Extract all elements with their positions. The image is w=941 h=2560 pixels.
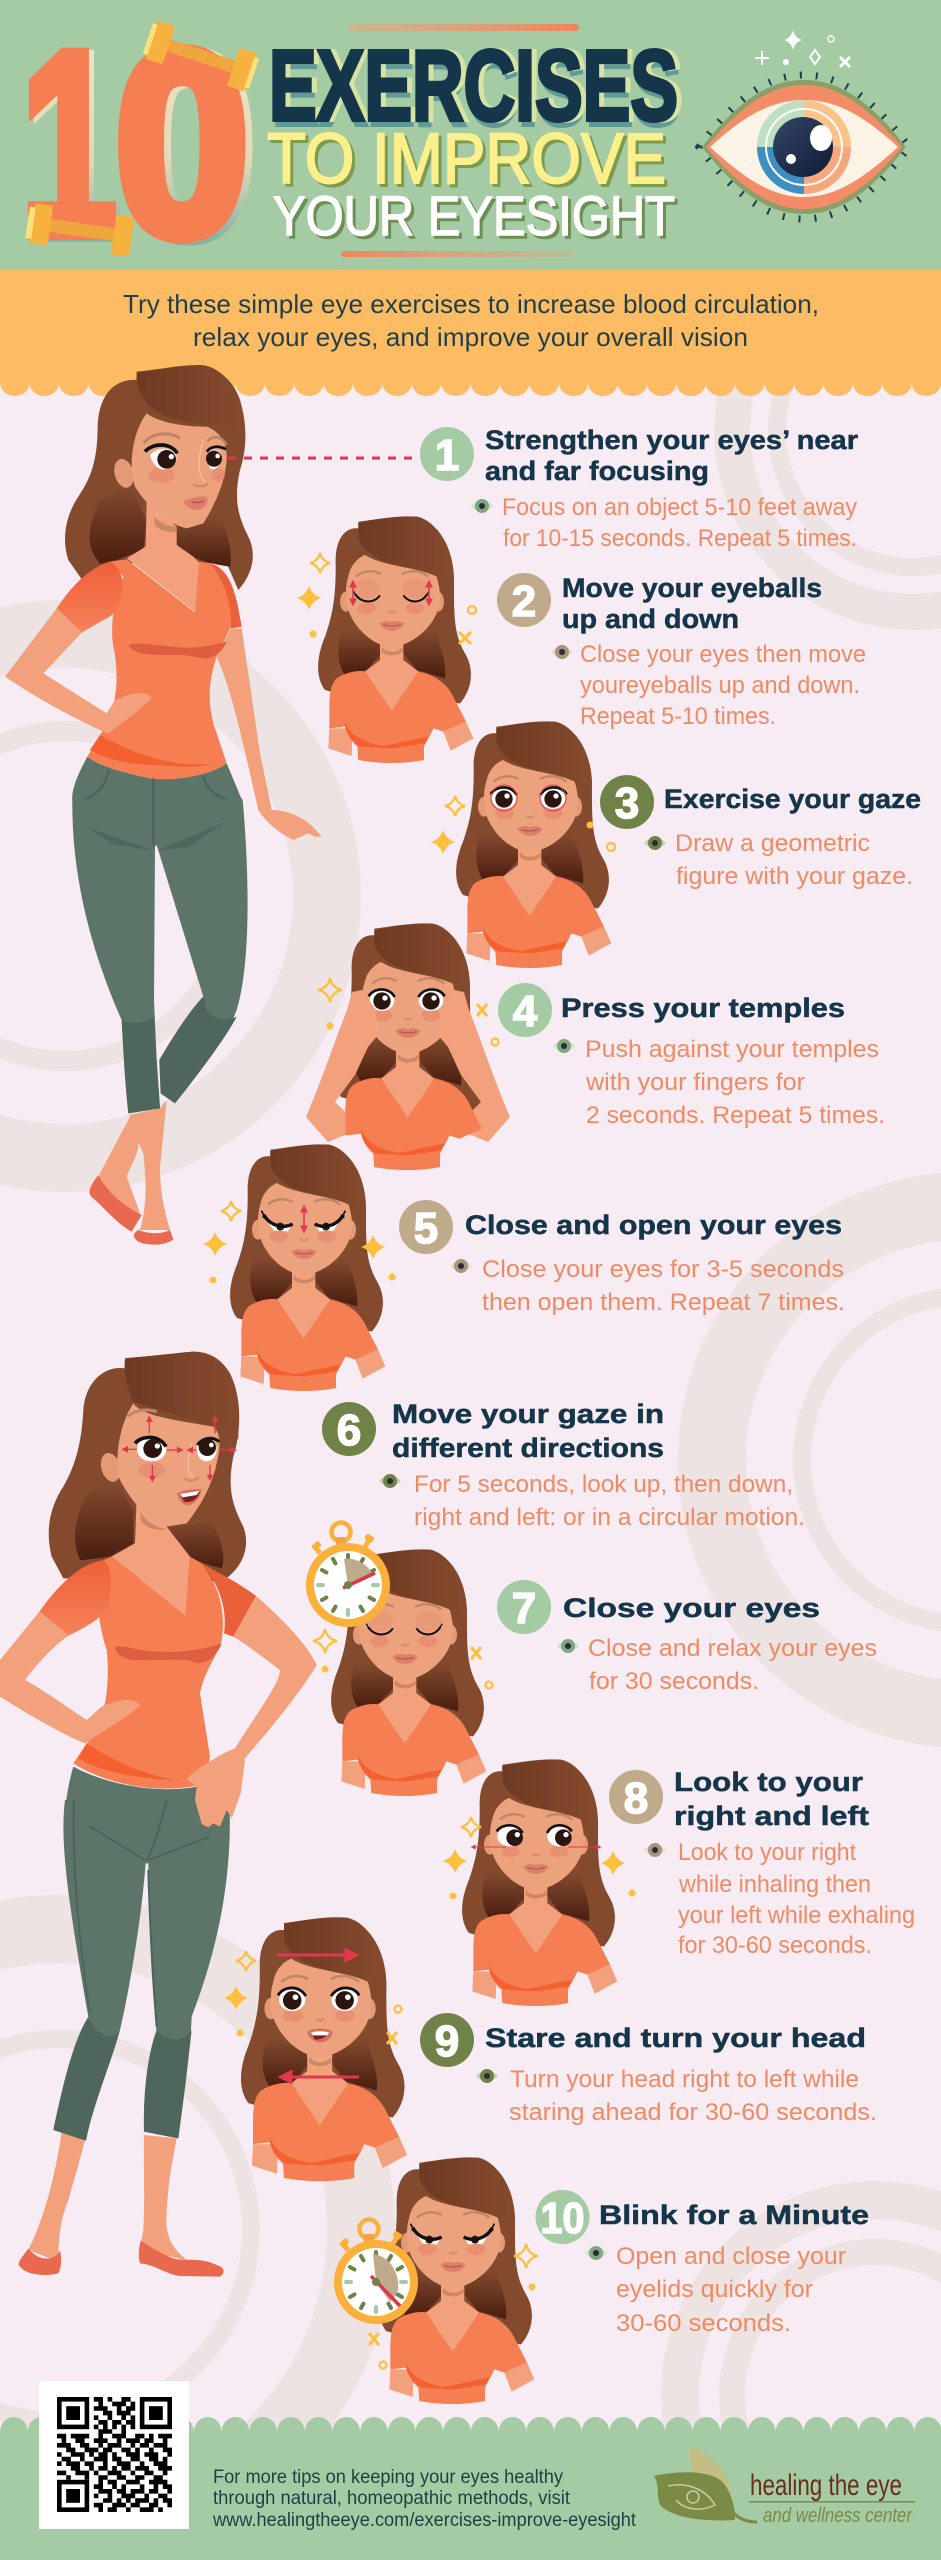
description 10: 30-60 seconds. — [616, 2310, 791, 2337]
step 4 — [498, 983, 885, 1129]
logo: and wellness center — [763, 2505, 913, 2527]
description 3 — [675, 830, 913, 890]
description 7: for 30 seconds. — [589, 1668, 759, 1695]
heading 2: Move your eyeballs — [562, 573, 822, 603]
numeral 10: 1 — [21, 0, 117, 290]
intro text: relax your eyes, and improve your overall vision — [193, 322, 748, 352]
step 2 — [497, 573, 866, 730]
bullet eye 8 — [644, 1843, 666, 1857]
step 5 — [399, 1200, 845, 1316]
heading 2: up and down — [562, 604, 739, 634]
heading 5: Close and open your eyes — [465, 1210, 842, 1240]
description 4 — [585, 1036, 885, 1129]
figure: woman one, standing — [5, 365, 322, 1245]
figure: bust for step 10 — [379, 2157, 534, 2404]
description 1 — [502, 494, 857, 552]
badge 3 — [600, 775, 654, 829]
step 10 — [536, 2190, 869, 2337]
step 3 — [600, 775, 921, 890]
heading 1 — [485, 425, 859, 486]
badge 6 — [322, 1402, 376, 1456]
badge 7: 7 — [512, 1584, 536, 1633]
step 7 — [497, 1580, 877, 1695]
footer text — [212, 2467, 637, 2531]
description 5: then open them. Repeat 7 times. — [482, 1289, 845, 1316]
bullet eye 2 — [551, 645, 573, 659]
icon: sparkles — [755, 30, 850, 67]
numeral 10 — [21, 0, 256, 292]
intro text — [123, 289, 819, 352]
description 3: Draw a geometric — [675, 830, 870, 857]
description 6: right and left: or in a circular motion. — [414, 1504, 805, 1531]
description 8: your left while exhaling — [678, 1902, 915, 1929]
figure: bust for step 7 — [331, 1549, 486, 1796]
logo — [654, 2445, 915, 2527]
description 8: for 30-60 seconds. — [678, 1932, 872, 1959]
heading 7: Close your eyes — [563, 1593, 820, 1623]
description 4: 2 seconds. Repeat 5 times. — [586, 1102, 885, 1129]
panel: header — [0, 0, 941, 292]
badge 2: 2 — [512, 577, 536, 626]
description 10 — [616, 2243, 846, 2337]
figure: bust for step 2 — [318, 516, 473, 763]
title: EXERCISES: EXERCISES — [272, 35, 681, 147]
bullet eye 7 — [557, 1639, 579, 1653]
title: YOUR EYESIGHT: YOUR EYESIGHT — [273, 184, 675, 247]
description 8: Look to your right — [678, 1839, 856, 1866]
description 10: eyelids quickly for — [616, 2276, 813, 2303]
description 2: youreyeballs up and down. — [580, 672, 860, 699]
bullet eye 1 — [471, 499, 493, 513]
badge 1 — [420, 427, 474, 481]
description 4: Push against your temples — [585, 1036, 879, 1063]
bullet eye 3 — [644, 836, 666, 850]
intro text: Try these simple eye exercises to increase blood circulation, — [123, 289, 819, 319]
bullet eye 10 — [585, 2246, 607, 2260]
heading 6 — [392, 1399, 664, 1463]
icon: bottom dumbbell — [25, 203, 134, 257]
description 8 — [678, 1839, 915, 1959]
heading 8: right and left — [674, 1801, 869, 1831]
step 6 — [322, 1399, 805, 1531]
step 8 — [609, 1767, 915, 1959]
icon: eye illustration — [699, 75, 909, 219]
numeral 10: 0 — [122, 0, 256, 292]
figure: bust for step 5 — [230, 1144, 385, 1391]
panel: intro band — [0, 270, 941, 396]
title: TO IMPROVE: TO IMPROVE — [270, 123, 669, 202]
badge 7 — [497, 1580, 551, 1634]
badge 6: 6 — [337, 1406, 361, 1455]
badge 4 — [498, 983, 552, 1037]
badge 5: 5 — [414, 1204, 438, 1253]
arrows on bust for step 9 — [277, 1955, 359, 2077]
heading 6: Move your gaze in — [392, 1399, 664, 1429]
hand on hip — [187, 1748, 245, 1827]
badge 3: 3 — [615, 779, 639, 828]
heading 9: Stare and turn your head — [485, 2023, 866, 2053]
figure: bust for step 4 — [306, 923, 510, 1170]
badge 8 — [609, 1770, 663, 1824]
figure: bust for step 8 — [462, 1759, 617, 2006]
description 9: Turn your head right to left while — [510, 2066, 859, 2093]
title: EXERCISES: EXERCISES — [274, 30, 683, 142]
description 5: Close your eyes for 3-5 seconds — [482, 1256, 844, 1283]
heading 10: Blink for a Minute — [599, 2200, 869, 2230]
heading 2 — [562, 573, 822, 634]
bullet eye 5 — [450, 1259, 472, 1273]
badge 9: 9 — [435, 2017, 459, 2066]
bottom divider — [341, 251, 573, 257]
arms pressing temples — [306, 990, 510, 1142]
heading 8: Look to your — [674, 1767, 864, 1797]
icon: stopwatch for step 7 — [306, 1522, 390, 1627]
description 2 — [580, 641, 866, 730]
icon: top dumbbell — [142, 19, 260, 93]
heading 3: Exercise your gaze — [664, 784, 921, 814]
figure: woman two, standing — [0, 1352, 317, 2277]
description 10: Open and close your — [616, 2243, 846, 2270]
description 9: staring ahead for 30-60 seconds. — [509, 2099, 877, 2126]
description 2: Close your eyes then move — [580, 641, 866, 668]
heading 6: different directions — [392, 1433, 664, 1463]
bullet eye 4 — [553, 1039, 575, 1053]
heading 1: Strengthen your eyes’ near — [485, 425, 859, 455]
description 8: while inhaling then — [678, 1871, 871, 1898]
figure: bust for step 9 — [241, 1917, 407, 2181]
description 5 — [482, 1256, 845, 1316]
description 4: with your fingers for — [585, 1069, 805, 1096]
description 1: Focus on an object 5-10 feet away — [502, 494, 857, 521]
badge 10: 10 — [540, 2194, 584, 2243]
description 7: Close and relax your eyes — [588, 1635, 877, 1662]
bullet eye 9 — [476, 2069, 498, 2083]
icon: stopwatch for step 10 — [334, 2220, 418, 2324]
heading 4: Press your temples — [561, 993, 845, 1023]
badge 8: 8 — [624, 1774, 648, 1823]
description 3: figure with your gaze. — [676, 863, 913, 890]
top divider — [348, 24, 579, 31]
heading 1: and far focusing — [485, 456, 709, 486]
footer text: through natural, homeopathic methods, visit — [213, 2488, 571, 2509]
badge 9 — [420, 2013, 474, 2067]
heading 8 — [674, 1767, 869, 1831]
footer text: For more tips on keeping your eyes healthy — [213, 2467, 563, 2488]
callout: dashed line from eye to step 1 — [228, 456, 418, 460]
description 7 — [588, 1635, 877, 1695]
title: TO IMPROVE: TO IMPROVE — [267, 120, 666, 199]
description 2: Repeat 5-10 times. — [580, 703, 776, 730]
description 9 — [509, 2066, 877, 2126]
panel: footer — [0, 2381, 941, 2560]
QR code — [39, 2381, 189, 2529]
title: EXERCISES: EXERCISES — [269, 30, 678, 142]
description 1: for 10-15 seconds. Repeat 5 times. — [503, 525, 857, 552]
sparkles around busts — [203, 586, 636, 2290]
badge 2 — [497, 573, 551, 627]
description 6: For 5 seconds, look up, then down, — [414, 1471, 793, 1498]
step 1 — [420, 425, 859, 552]
figure: bust for step 3 — [456, 721, 611, 968]
title: YOUR EYESIGHT: YOUR EYESIGHT — [276, 187, 678, 250]
bullet eye 6 — [379, 1474, 401, 1488]
footer text: www.healingtheeye.com/exercises-improve-eyesight — [212, 2510, 637, 2531]
step 9 — [420, 2013, 877, 2126]
badge 4: 4 — [513, 987, 538, 1036]
badge 1: 1 — [435, 431, 459, 480]
numeral 10: 0 — [115, 0, 249, 290]
badge 5 — [399, 1200, 453, 1254]
numeral 10: 1 — [26, 0, 122, 292]
description 6 — [414, 1471, 805, 1531]
